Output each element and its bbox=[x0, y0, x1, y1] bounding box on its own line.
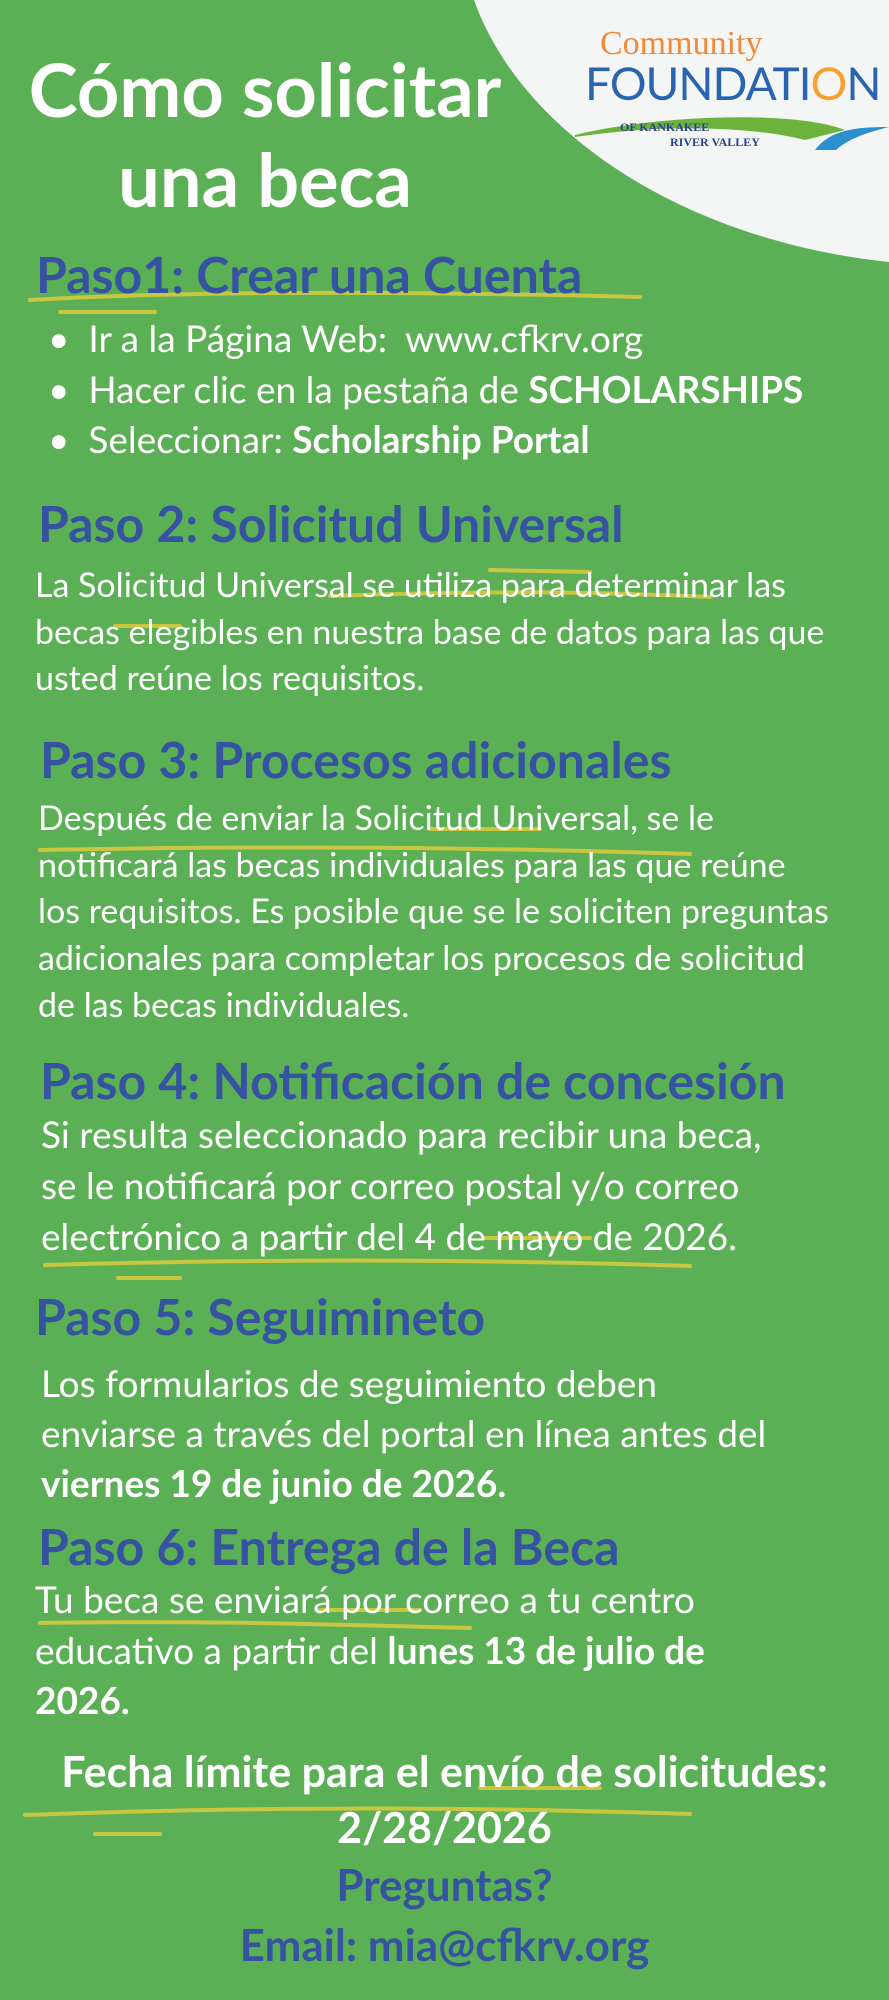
step 1 bullets: • Seleccionar: Scholarship Portal bbox=[48, 416, 590, 461]
step 4 heading: Paso 4: Notificación de concesión bbox=[40, 1050, 786, 1110]
step 6 text: Tu beca se enviará por correo a tu centro bbox=[35, 1576, 695, 1621]
title: Cómo solicitar bbox=[29, 44, 501, 133]
deadline bbox=[61, 1746, 828, 1853]
deadline: 2/28/2026 bbox=[337, 1802, 552, 1853]
step 1 bullets: • Ir a la Página Web: www.cfkrv.org bbox=[48, 315, 643, 360]
step 2 text: becas elegibles en nuestra base de datos para las que bbox=[35, 610, 824, 652]
contact: Preguntas? bbox=[336, 1859, 553, 1911]
step 3 text: adicionales para completar los procesos de solicitud bbox=[38, 937, 805, 978]
step 4 text: electrónico a partir del 4 de mayo de 2026. bbox=[41, 1213, 737, 1258]
logo: OF KANKAKEE bbox=[620, 120, 709, 134]
step 1 bullets bbox=[48, 315, 803, 461]
step 3 text: Después de enviar la Solicitud Universal, se le bbox=[38, 797, 714, 838]
logo bbox=[575, 25, 889, 150]
step 3 text: notificará las becas individuales para las que reúne bbox=[38, 844, 786, 885]
step 2 text: usted reúne los requisitos. bbox=[35, 657, 424, 698]
step 6 heading: Paso 6: Entrega de la Beca bbox=[38, 1516, 620, 1576]
step 4 text: Si resulta seleccionado para recibir una beca, bbox=[41, 1111, 761, 1156]
contact: Email: mia@cfkrv.org bbox=[240, 1919, 649, 1971]
logo: FOUNDATION bbox=[585, 55, 880, 110]
step 5 text: Los formularios de seguimiento deben bbox=[41, 1360, 657, 1405]
step 2 heading: Paso 2: Solicitud Universal bbox=[38, 493, 624, 553]
step 5 heading: Paso 5: Seguimineto bbox=[35, 1286, 485, 1346]
step 2 text bbox=[35, 564, 824, 698]
logo: RIVER VALLEY bbox=[670, 135, 760, 149]
step 5 text: viernes 19 de junio de 2026. bbox=[41, 1460, 506, 1505]
step 3 text: de las becas individuales. bbox=[38, 984, 409, 1025]
step 6 text: 2026. bbox=[35, 1677, 130, 1722]
deadline: Fecha límite para el envío de solicitudes: bbox=[61, 1746, 828, 1797]
contact bbox=[240, 1859, 649, 1971]
step 4 text bbox=[41, 1111, 761, 1258]
step 5 text bbox=[41, 1360, 766, 1505]
step 6 text: educativo a partir del lunes 13 de julio de bbox=[35, 1626, 705, 1672]
step 3 heading: Paso 3: Procesos adicionales bbox=[40, 729, 671, 789]
step 1 bullets: • Hacer clic en la pestaña de SCHOLARSHIPS bbox=[48, 366, 803, 410]
step 1 heading: Paso1: Crear una Cuenta bbox=[36, 244, 582, 304]
title: una beca bbox=[118, 134, 412, 223]
decorative white curve bbox=[474, 0, 889, 262]
step 3 text: los requisitos. Es posible que se le soliciten preguntas bbox=[38, 890, 829, 931]
step 5 text: enviarse a través del portal en línea antes del bbox=[41, 1410, 766, 1455]
step 6 text bbox=[35, 1576, 705, 1722]
step 4 text: se le notificará por correo postal y/o correo bbox=[41, 1162, 739, 1207]
step 3 text bbox=[38, 797, 829, 1025]
step 2 text: La Solicitud Universal se utiliza para determinar las bbox=[35, 564, 786, 605]
logo: Community bbox=[600, 25, 762, 62]
title bbox=[29, 44, 501, 223]
